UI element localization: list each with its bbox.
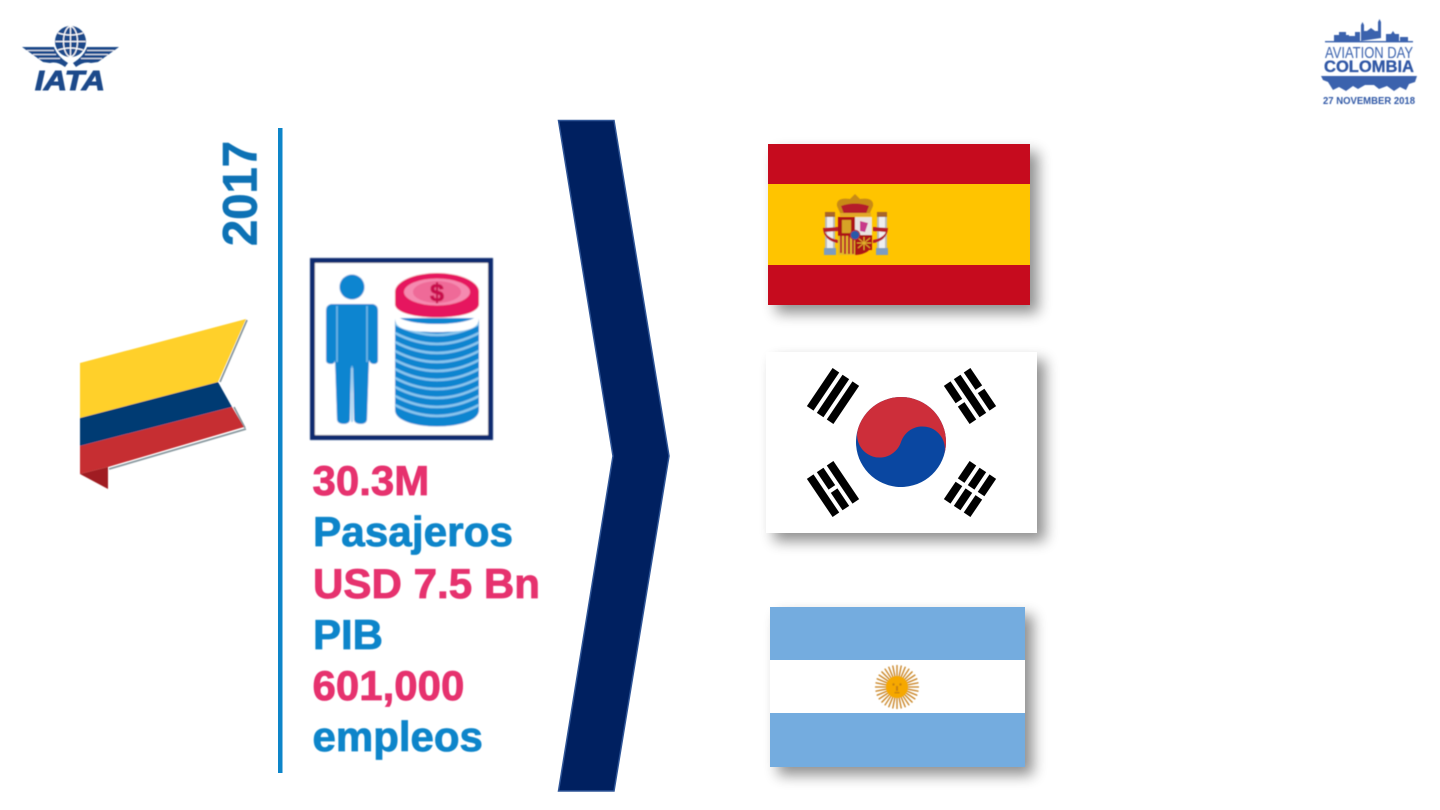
icon: foliage band (1321, 76, 1417, 91)
icon: pink top coin (395, 273, 479, 318)
icon: skyline (1325, 19, 1413, 42)
flag: Argentina (770, 607, 1033, 775)
stat: jobs value: 601,000 (312, 662, 464, 709)
logo line: Aviation Day: AVIATION DAY (1325, 45, 1413, 62)
icon: trigram lower right (944, 461, 996, 517)
arrow: chevron (558, 120, 669, 791)
icon: pink top coin: $ (430, 279, 444, 307)
icon: trigram lower left (807, 461, 859, 517)
icon frame (312, 260, 490, 438)
vertical timeline line (278, 128, 282, 773)
stat: passengers label: Pasajeros (313, 508, 513, 555)
year label: 2017: 2017 (214, 141, 268, 246)
pillars (825, 213, 835, 255)
icon: person (326, 274, 378, 424)
crown (837, 194, 873, 215)
icon: trigram upper right (944, 368, 996, 424)
icon: taegeuk (844, 385, 958, 499)
icon: person and coin stack (312, 260, 490, 438)
stat: passengers value: 30.3M (312, 457, 429, 504)
logo line: Colombia: COLOMBIA (1324, 58, 1414, 76)
logo line: date: 27 NOVEMBER 2018 (1323, 96, 1415, 107)
stat: GDP value: USD 7.5 Bn (313, 560, 540, 607)
icon: right wing (73, 47, 119, 67)
shield (838, 217, 872, 255)
stat: GDP label: PIB (313, 611, 383, 658)
icon: left wing (22, 47, 68, 67)
icon: blue coin stack (395, 312, 479, 426)
icon: Spanish coat of arms (823, 194, 888, 255)
flag: South Korea (766, 352, 1045, 541)
flag: Spain (768, 144, 1038, 313)
icon: trigram upper left (807, 368, 859, 424)
icon: sun of May (875, 665, 919, 709)
stat: jobs label: empleos (312, 713, 483, 760)
icon: Colombia flag ribbon (80, 319, 247, 489)
logo wordmark: IATA (35, 65, 105, 96)
stats text block (312, 457, 540, 760)
logo: IATA (22, 26, 119, 96)
logo: Aviation Day Colombia (1321, 19, 1417, 107)
icon: globe (55, 26, 86, 57)
